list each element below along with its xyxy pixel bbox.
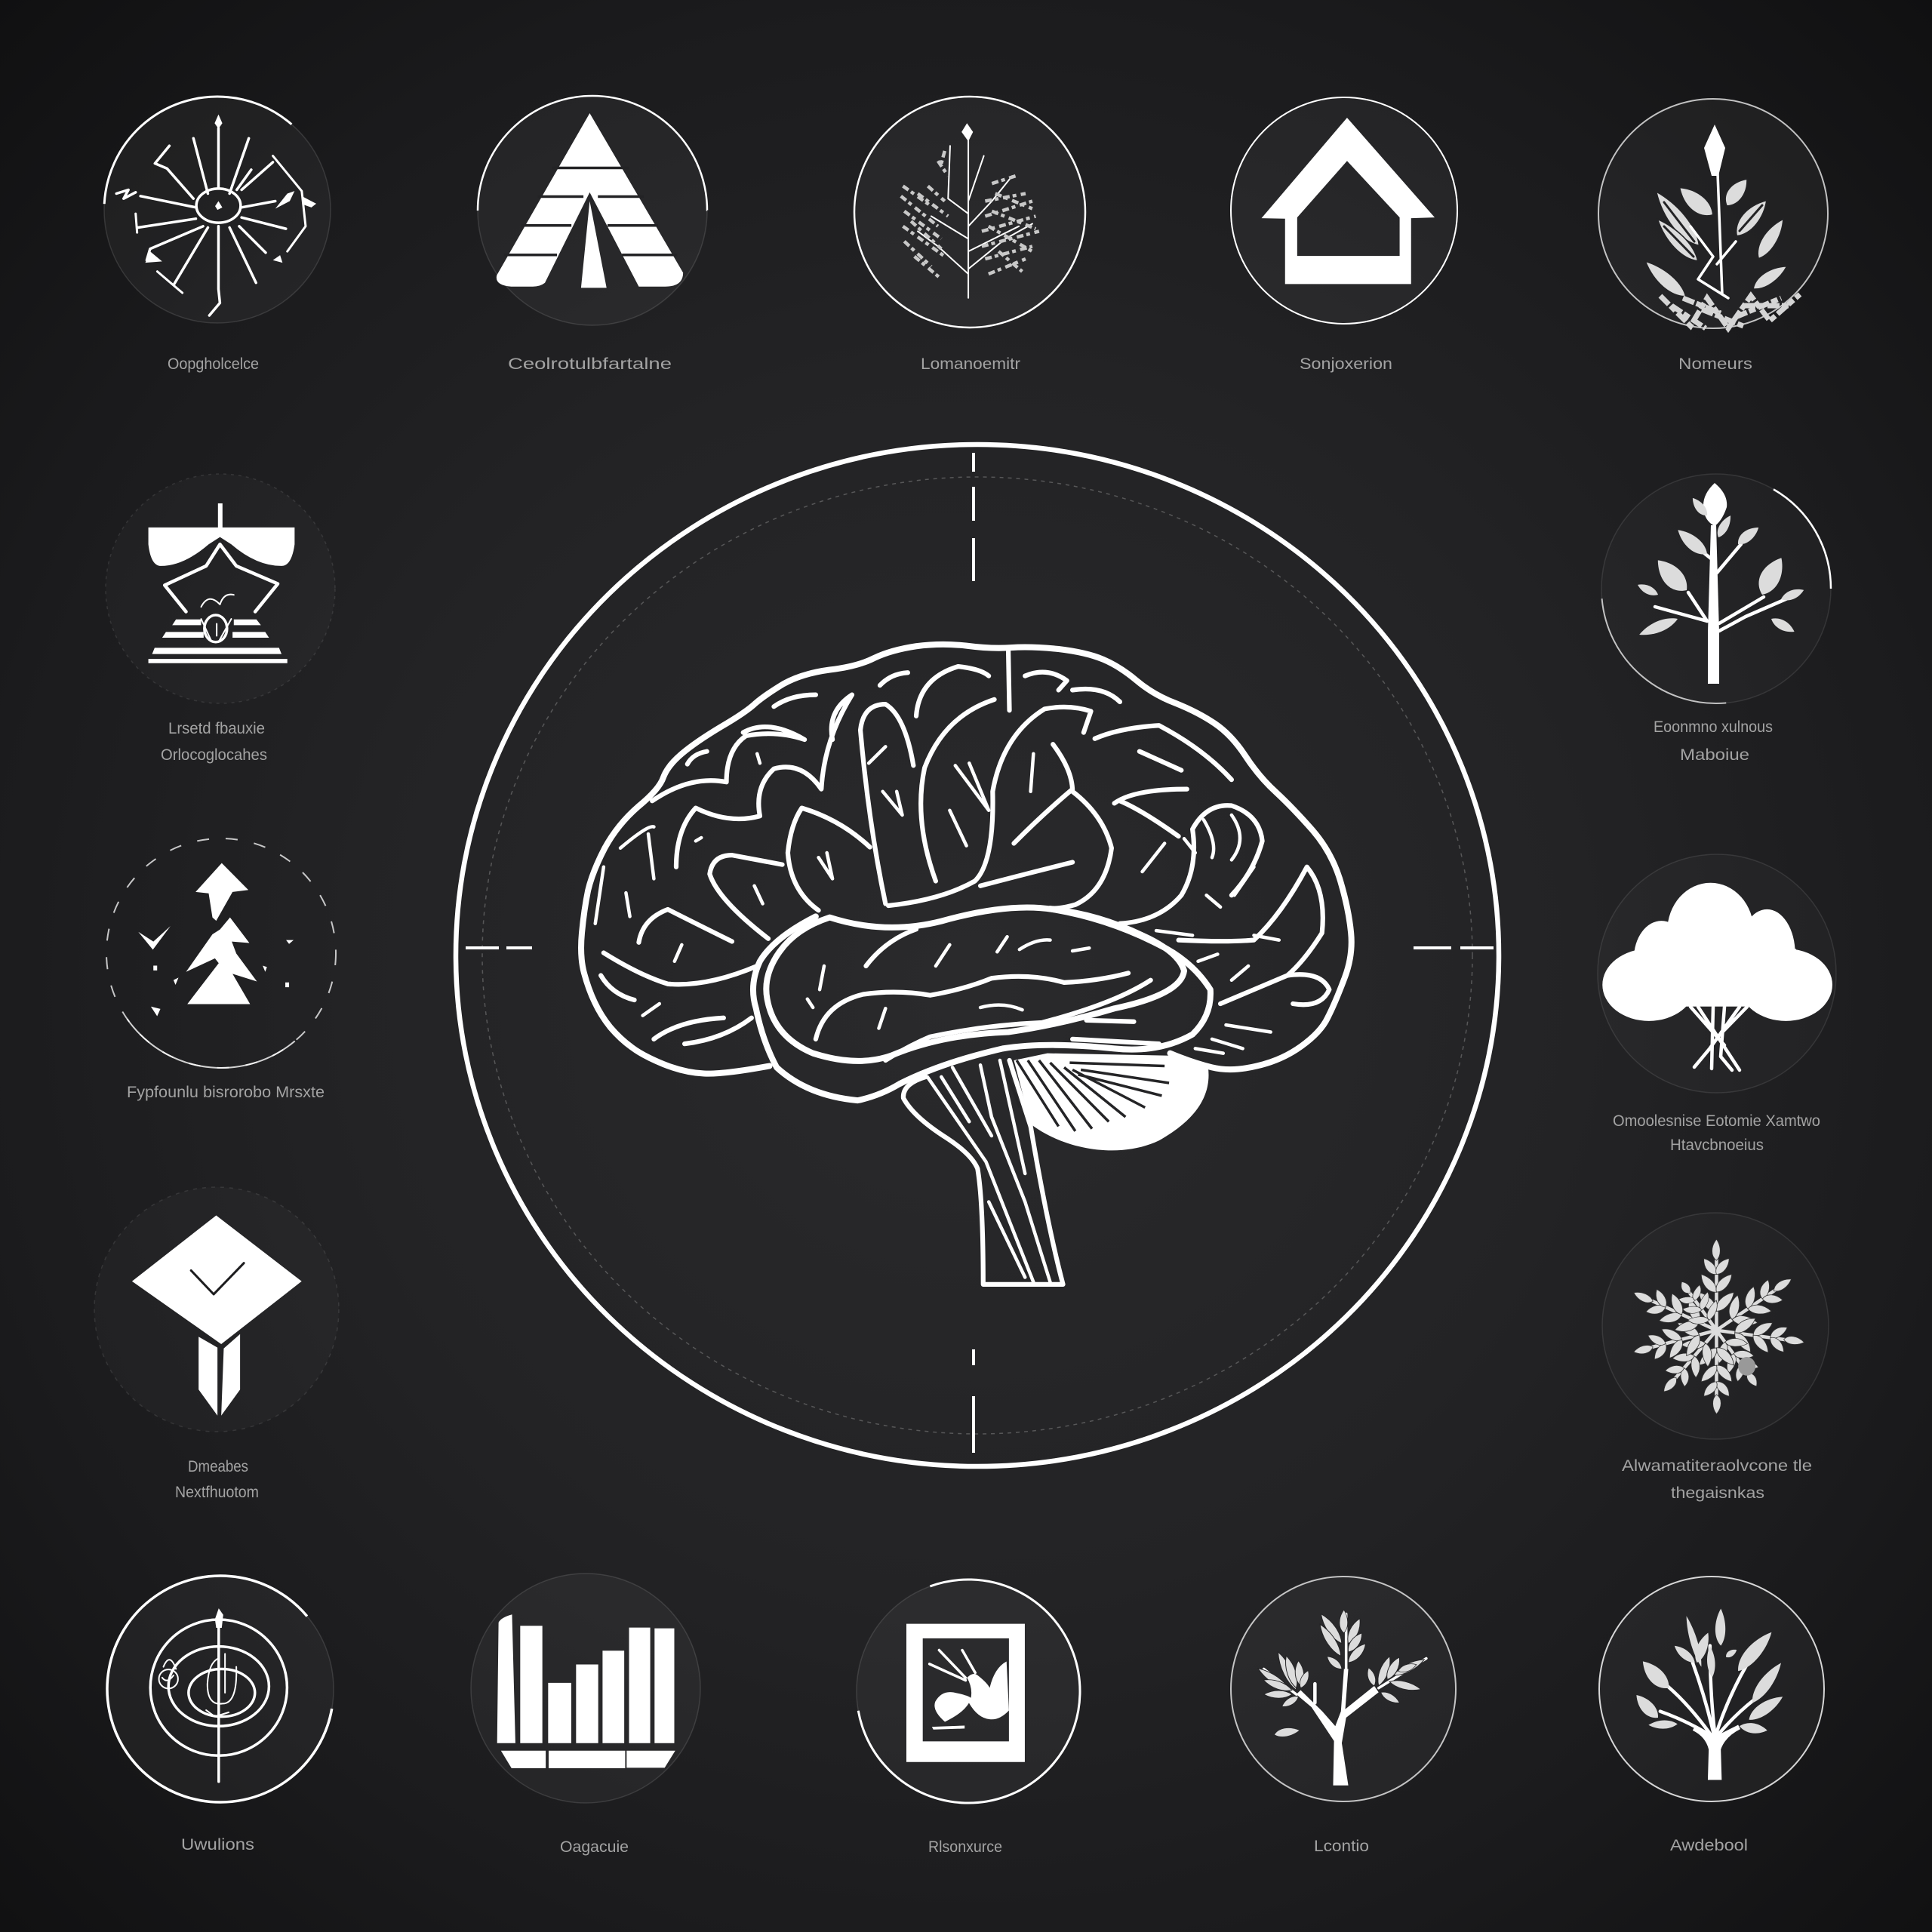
label 14: thegaisnkas bbox=[1671, 1484, 1764, 1502]
label 15: Maboiue bbox=[1680, 746, 1749, 764]
cerebellum bbox=[1003, 1054, 1208, 1150]
icon 13: broad leaf tree bbox=[1599, 1577, 1824, 1801]
temporal lobe bbox=[753, 907, 1211, 1100]
icon 16: cloud tree bbox=[1598, 854, 1836, 1093]
label 16: Htavcbnoeius bbox=[1670, 1137, 1764, 1154]
cortex outline bbox=[581, 645, 1352, 1074]
label 15: Eoonmno xulnous bbox=[1654, 718, 1773, 736]
cortex gyri bbox=[595, 650, 1329, 1054]
label 14 bbox=[1622, 1457, 1812, 1502]
label 6: Lrsetd fbauxie bbox=[168, 720, 265, 737]
central circle frame with crosshair ticks bbox=[456, 445, 1499, 1466]
label 15 bbox=[1654, 718, 1773, 764]
label 16: Omoolesnise Eotomie Xamtwo bbox=[1613, 1112, 1820, 1130]
label 1: Oopgholcelce bbox=[168, 355, 259, 373]
label 6: Orlocoglocahes bbox=[161, 746, 267, 764]
label 11: Rlsonxurce bbox=[928, 1838, 1002, 1856]
label 4: Sonjoxerion bbox=[1300, 355, 1392, 373]
label 8: Nextfhuotom bbox=[175, 1484, 259, 1501]
icon 5: leafy plant bbox=[1598, 99, 1828, 328]
label 8: Dmeabes bbox=[188, 1458, 248, 1475]
brain stem bbox=[903, 1060, 1063, 1284]
icon 2: striped tent bbox=[478, 96, 707, 325]
icon 8: diamond check and tail bbox=[94, 1187, 339, 1432]
icon 14: star of leaves bbox=[1602, 1213, 1829, 1439]
icon 6: balance with heart bbox=[106, 474, 335, 703]
icon 1: sunburst bbox=[98, 91, 337, 329]
label 12: Lcontio bbox=[1314, 1838, 1369, 1855]
label 10: Oagacuie bbox=[560, 1838, 629, 1856]
label 5: Nomeurs bbox=[1678, 355, 1752, 373]
icon 3: sparse tree bbox=[854, 97, 1085, 328]
icon 10: bar chart bbox=[471, 1574, 700, 1803]
icon 12: branching tree bbox=[1231, 1577, 1456, 1801]
label 9: Uwulions bbox=[181, 1836, 254, 1854]
icon 4: house bbox=[1231, 97, 1457, 324]
label 14: Alwamatiteraolvcone tle bbox=[1622, 1457, 1812, 1475]
label 13: Awdebool bbox=[1670, 1837, 1748, 1854]
icon 11: framed heart picture bbox=[825, 1548, 1112, 1835]
label 6 bbox=[161, 720, 267, 764]
label 7: Fypfounlu bisrorobo Mrsxte bbox=[127, 1084, 325, 1101]
icon 9: concentric target bbox=[89, 1558, 352, 1820]
central brain illustration bbox=[581, 645, 1352, 1284]
icon 15: sapling bbox=[1559, 432, 1873, 746]
label 3: Lomanoemitr bbox=[921, 355, 1020, 373]
label 2: Ceolrotulbfartalne bbox=[508, 355, 672, 373]
icon 7: arrow and fir tree bbox=[60, 792, 383, 1115]
label 16 bbox=[1613, 1112, 1820, 1154]
label 8 bbox=[175, 1458, 259, 1501]
